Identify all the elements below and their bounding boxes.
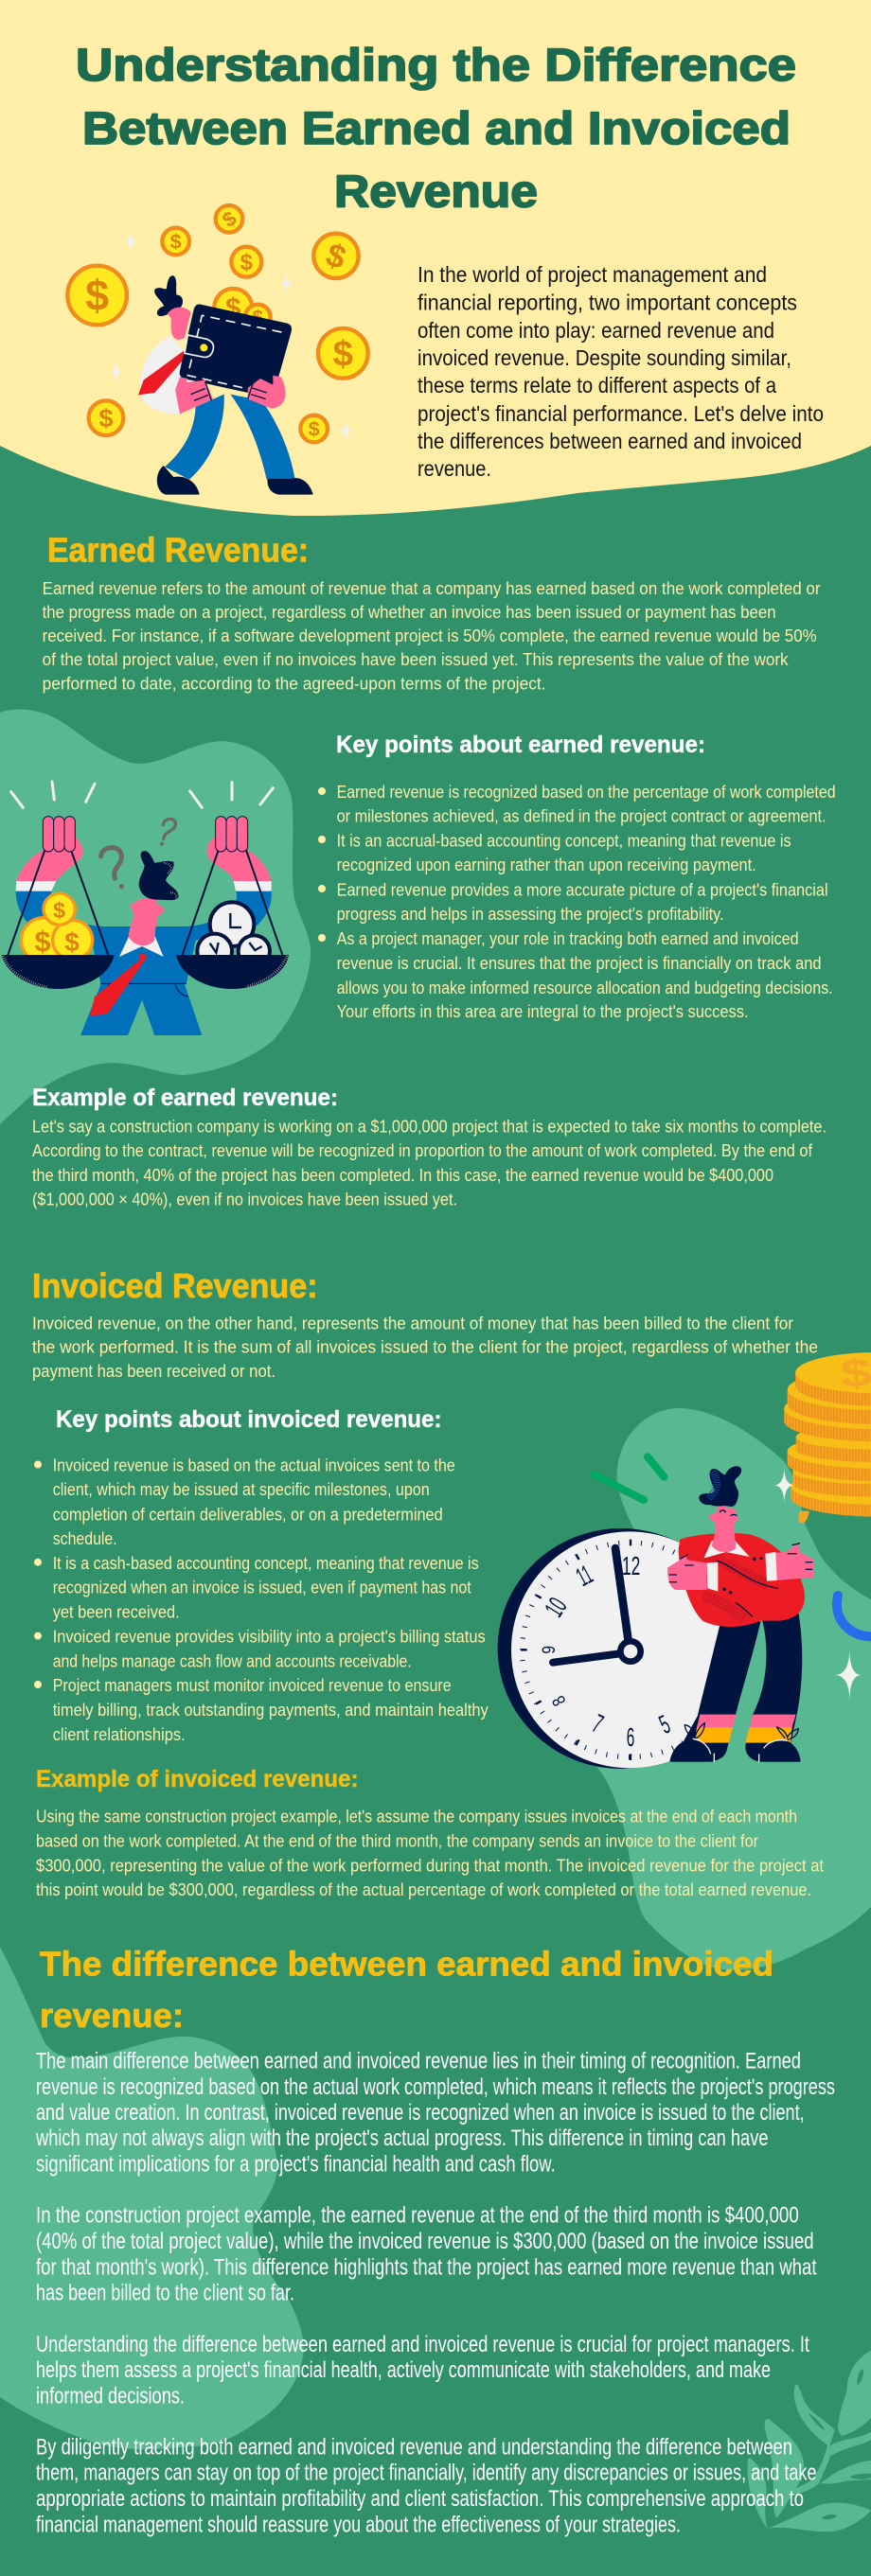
- head and neck: [129, 896, 164, 945]
- text: example of earned revenue: the third month, 40% of the project has been completed. In this case, the earned revenue would be $400,000: [32, 1166, 773, 1185]
- green dashes: [594, 1456, 664, 1500]
- left arm sleeve: [16, 881, 56, 891]
- icon: dollar signs: $: [225, 292, 240, 324]
- text: difference paragraph 3: informed decisions.: [36, 2383, 185, 2409]
- icon: coins: [67, 205, 368, 442]
- clock numerals: 11: [571, 1560, 597, 1592]
- finger lines: [191, 380, 267, 400]
- text: difference paragraph 2: [36, 2203, 817, 2305]
- socks yellow: [694, 1727, 792, 1743]
- intro paragraph: invoiced revenue. Despite sounding similar,: [418, 345, 791, 370]
- text: example of invoiced revenue: this point would be $300,000, regardless of the actual percentage of work completed or the total earned revenue.: [36, 1880, 811, 1899]
- text: invoiced revenue definition: [32, 1314, 818, 1381]
- header cream wave: [0, 0, 871, 516]
- intro paragraph: project's financial performance. Let's delve into: [418, 401, 824, 426]
- heading: earned revenue: Earned Revenue:: [47, 530, 309, 570]
- wallet: [180, 305, 292, 397]
- illustration: man with clock: [498, 1456, 871, 1769]
- intro paragraph: financial reporting, two important concepts: [418, 290, 797, 314]
- arms and torso: [16, 891, 272, 984]
- clock numerals: 6: [627, 1722, 634, 1752]
- figure shirt: [140, 336, 196, 414]
- trousers: [80, 984, 202, 1035]
- heading: the difference between earned and invoiced revenue: The difference between earned and invoiced: [40, 1944, 773, 1984]
- title: Between Earned and Invoiced: [82, 104, 791, 154]
- icon: dollar signs: $: [240, 250, 253, 275]
- text: earned revenue definition: of the total project value, even if no invoices have been issued yet. This represents the value of the work: [43, 650, 790, 669]
- blue arc: [837, 1596, 871, 1636]
- hair speckle: [164, 863, 176, 899]
- heading: the difference between earned and invoiced revenue: revenue:: [40, 1996, 184, 2035]
- title: Understanding the Difference: [76, 41, 796, 91]
- trouser lines: [95, 983, 188, 997]
- list: earned revenue key points: recognized upon earning rather than upon receiving payment.: [337, 856, 756, 874]
- list: earned revenue key points: or milestones achieved, as defined in the project contract or agreement.: [337, 807, 827, 826]
- list: earned revenue key points: Earned revenue provides a more accurate picture of a project's financial: [337, 880, 828, 899]
- figure trousers: [165, 395, 295, 480]
- illustration: man balancing coins and clocks on scales: [2, 782, 289, 1035]
- icon: dollar signs: $: [218, 206, 240, 232]
- buttons: [722, 1557, 763, 1594]
- shoes: [669, 1739, 801, 1762]
- text: invoiced revenue definition: Invoiced revenue, on the other hand, represents the amount of money that has been billed to the client for: [32, 1314, 793, 1333]
- list: earned revenue key points: As a project manager, your role in tracking both earned and invoiced: [337, 929, 799, 948]
- socks pink: [697, 1715, 796, 1727]
- face and neck: [709, 1505, 738, 1552]
- scale pans: [2, 955, 289, 989]
- intro paragraph: these terms relate to different aspects of a: [418, 373, 776, 397]
- illustration: man carrying wallet with coins: [67, 205, 368, 495]
- arms skin: [16, 837, 272, 881]
- dollar signs on left pan: $: [53, 898, 65, 923]
- question marks: [101, 819, 175, 878]
- heading: example of earned revenue: Example of earned revenue:: [32, 1085, 338, 1111]
- list: earned revenue key points: [318, 783, 836, 1021]
- icon: sparkles: [773, 1466, 862, 1702]
- figure shoes: [157, 466, 313, 495]
- background blob: invoiced illustration: [568, 1408, 871, 1970]
- wallet clasp: [185, 335, 213, 357]
- list: earned revenue key points: Your efforts in this area are integral to the project's success.: [337, 1002, 749, 1021]
- clock hands: [210, 913, 262, 953]
- text: difference paragraph 4: [36, 2435, 816, 2537]
- eyes: [720, 1510, 737, 1516]
- list: invoiced revenue key points: client relationships.: [53, 1725, 186, 1744]
- hand right: [767, 1544, 814, 1580]
- clock numerals: 10: [539, 1593, 573, 1622]
- heading: key points about invoiced revenue: Key points about invoiced revenue:: [56, 1406, 441, 1433]
- list: invoiced revenue key points: client, which may be issued at specific milestones, upon: [53, 1480, 430, 1499]
- dollar signs on left pan: [34, 898, 80, 958]
- heading: invoiced revenue: Invoiced Revenue:: [32, 1266, 318, 1305]
- icon: dollar signs: $: [309, 417, 320, 441]
- wallet stitching: [187, 315, 281, 390]
- figure legs: [672, 1612, 802, 1762]
- text: difference paragraph 1: significant implications for a project's financial health and cash flow.: [36, 2151, 556, 2177]
- text: earned revenue definition: [43, 579, 821, 693]
- text: difference paragraph 3: [36, 2332, 809, 2409]
- hair: [139, 851, 178, 900]
- list: invoiced revenue key points: Invoiced revenue is based on the actual invoices sent to the: [53, 1456, 455, 1475]
- collar: [703, 1541, 750, 1559]
- clock numerals: 8: [547, 1692, 570, 1710]
- list: earned revenue key points: progress and helps in assessing the project's profitability.: [337, 905, 724, 924]
- list: earned revenue key points: It is an accrual-based accounting concept, meaning that revenue is: [337, 832, 791, 851]
- list: invoiced revenue key points: recognized when an invoice is issued, even if payment has not: [53, 1579, 471, 1597]
- decorative leaves: [747, 2350, 871, 2532]
- hands: [175, 376, 286, 414]
- text: difference paragraph 1: [35, 2049, 835, 2177]
- text: difference paragraph 2: has been billed to the client so far.: [36, 2280, 294, 2305]
- question mark dots: [119, 842, 164, 889]
- dollar signs on left pan: $: [34, 926, 51, 958]
- icon: dollar signs: $: [333, 334, 353, 375]
- fingers: [43, 817, 248, 852]
- intro paragraph: [418, 262, 824, 481]
- icon: dollar signs: $: [170, 230, 182, 254]
- list: invoiced revenue key points: Invoiced revenue provides visibility into a project's billing status: [53, 1628, 486, 1647]
- list: invoiced revenue key points: completion of certain deliverables, or on a predetermined: [53, 1505, 443, 1524]
- text: example of earned revenue: [32, 1117, 827, 1209]
- clock numerals: 9: [538, 1646, 559, 1654]
- list: invoiced revenue key points: timely billing, track outstanding payments, and maintain healthy: [53, 1701, 489, 1720]
- scale strings: [8, 850, 282, 955]
- clock hands: [553, 1548, 630, 1663]
- list: invoiced revenue key points: yet been received.: [53, 1603, 180, 1622]
- heading: key points about earned revenue: Key points about earned revenue:: [336, 732, 705, 758]
- coins on left pan: [21, 893, 93, 962]
- icon: dollar signs: $: [322, 237, 350, 276]
- clock numerals: 12: [622, 1551, 640, 1580]
- hair: [699, 1466, 741, 1507]
- clock numerals: [538, 1551, 674, 1752]
- heading: example of invoiced revenue: Example of invoiced revenue:: [36, 1766, 358, 1792]
- right arm sleeve: [234, 881, 272, 891]
- icon: dollar signs: [85, 206, 353, 441]
- finger lines: [669, 1544, 812, 1582]
- clock numerals: 7: [588, 1709, 608, 1738]
- text: earned revenue definition: performed to date, according to the agreed-upon terms of the project.: [43, 674, 546, 693]
- background blob: earned key points: [0, 709, 311, 1124]
- tie: [90, 953, 148, 1015]
- heading: the difference between earned and invoiced revenue: [40, 1944, 773, 2035]
- text: earned revenue definition: received. For instance, if a software development project is 50% complete, the earned revenue would be 50%: [43, 626, 817, 645]
- list: invoiced revenue key points: Project managers must monitor invoiced revenue to ensure: [53, 1676, 452, 1695]
- text: earned revenue definition: the progress made on a project, regardless of whether an invoice has been issued or payment has been: [43, 603, 776, 622]
- text: earned revenue definition: Earned revenue refers to the amount of revenue that a company has earned based on the work completed or: [43, 579, 821, 598]
- dollar signs on left pan: $: [64, 927, 80, 957]
- background blob: difference section: [0, 1947, 304, 2449]
- light rays: [11, 782, 273, 807]
- icon: stacked coins: [784, 1350, 871, 1524]
- clocks on right pan: [197, 902, 270, 968]
- figure torso: [679, 1533, 805, 1627]
- intro paragraph: often come into play: earned revenue and: [418, 318, 774, 343]
- shoe highlight: [693, 1738, 788, 1762]
- list: invoiced revenue key points: and helps manage cash flow and accounts receivable.: [53, 1651, 412, 1670]
- clasp button: [200, 344, 207, 351]
- text: example of invoiced revenue: [36, 1808, 824, 1899]
- list: invoiced revenue key points: [34, 1456, 489, 1744]
- text: example of invoiced revenue: based on the work completed. At the end of the third month, the company sends an invoice to the client for: [36, 1831, 758, 1850]
- hand left: [667, 1555, 707, 1590]
- shoe laces: [684, 1723, 798, 1739]
- text: invoiced revenue definition: the work performed. It is the sum of all invoices issued to the client for the project, regardless of whether the: [32, 1338, 818, 1357]
- clock numerals: 5: [655, 1709, 674, 1739]
- text: example of invoiced revenue: $300,000, representing the value of the work performed during that month. The invoiced revenue for the project at: [36, 1857, 824, 1876]
- icon: dollar signs: $: [253, 308, 264, 328]
- arm speckle: [703, 1555, 767, 1618]
- list: invoiced revenue key points: schedule.: [53, 1529, 117, 1548]
- clock: [498, 1528, 748, 1769]
- intro paragraph: In the world of project management and: [418, 262, 767, 287]
- list: invoiced revenue key points: It is a cash-based accounting concept, meaning that revenue is: [53, 1554, 479, 1573]
- title: [76, 41, 796, 218]
- text: example of earned revenue: According to the contract, revenue will be recognized in proportion to the amount of work completed. By the end of: [32, 1141, 813, 1160]
- arm fold line: [717, 1561, 778, 1616]
- cuffs: [707, 1552, 777, 1592]
- figure tie: [138, 351, 187, 395]
- title: Revenue: [334, 167, 538, 218]
- icon: sparkles: [110, 229, 352, 444]
- intro paragraph: the differences between earned and invoiced: [418, 429, 802, 453]
- text: invoiced revenue definition: payment has been received or not.: [32, 1362, 276, 1381]
- figure hair: [154, 275, 183, 316]
- text: difference paragraph 4: financial management should reassure you about the effectiveness of your strategies.: [36, 2512, 681, 2537]
- text: example of earned revenue: ($1,000,000 × 40%), even if no invoices have been issued yet.: [32, 1191, 457, 1209]
- hair highlight: [708, 1472, 717, 1498]
- intro paragraph: revenue.: [418, 456, 491, 481]
- list: earned revenue key points: revenue is crucial. It ensures that the project is financially on track and: [337, 954, 822, 973]
- icon: dollar signs: $: [85, 272, 109, 320]
- text: example of invoiced revenue: Using the same construction project example, let's assume the company issues invoices at the end of each month: [36, 1808, 797, 1826]
- pan speckle: [3, 956, 287, 987]
- figure head: [168, 308, 191, 340]
- collar: [119, 935, 164, 957]
- icon: dollar signs: $: [98, 404, 114, 432]
